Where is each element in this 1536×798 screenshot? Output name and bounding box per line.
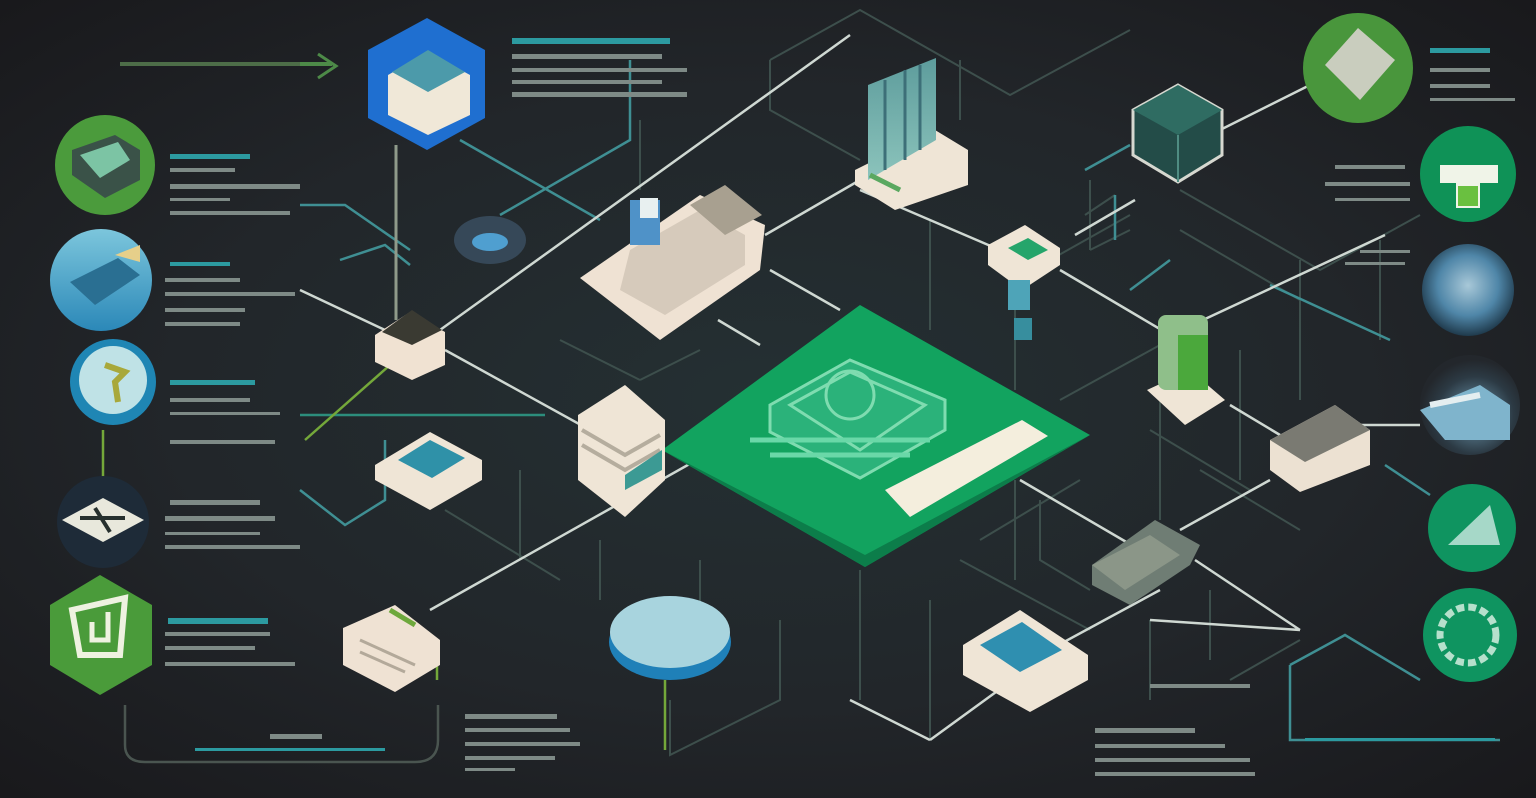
node: cream tile — [375, 432, 482, 510]
node: stack left of platform — [578, 385, 665, 517]
node: small green chip — [988, 225, 1060, 340]
node: grey slab — [1092, 520, 1200, 605]
icon: right green badge 1 — [1303, 13, 1413, 123]
tower: glass building — [855, 58, 968, 210]
bright network lines — [300, 35, 1420, 740]
icon: left blue badge 3 — [70, 339, 156, 425]
icon: right green badge 2 — [1420, 126, 1516, 222]
icon: right blue sphere 3 — [1422, 244, 1514, 336]
node: small glow disc — [454, 216, 526, 264]
arrow: top left — [120, 54, 336, 78]
node: note block — [343, 605, 440, 692]
node: battery — [1147, 315, 1225, 425]
icon: left green badge 5 — [50, 575, 152, 695]
cube: dark teal — [1133, 85, 1222, 182]
olive vertical connector — [394, 145, 398, 320]
node: cream cube left — [375, 310, 445, 380]
icon: left blue badge 2 — [50, 229, 152, 331]
icon: right green badge 6 — [1423, 588, 1517, 682]
machine: top cream building — [580, 185, 765, 340]
node: blue tile bottom — [963, 610, 1088, 712]
icon: right green badge 5 — [1428, 484, 1516, 572]
icon: left dark badge 4 — [57, 476, 149, 568]
icon: shield on platform — [750, 360, 945, 478]
panel: central green platform — [662, 305, 1090, 567]
green connector — [103, 365, 665, 750]
dim network grid lines — [445, 10, 1420, 755]
icon: right dark badge 4 — [1420, 355, 1520, 455]
callout: cream bar — [885, 420, 1048, 517]
frame: bottom left bracket — [125, 705, 438, 762]
icon: blue hexagon top — [368, 18, 485, 150]
node: grey server — [1270, 405, 1370, 492]
icon: left green badge 1 — [55, 115, 155, 215]
teal accent lines — [300, 60, 1500, 740]
node: blue disc — [609, 596, 731, 680]
